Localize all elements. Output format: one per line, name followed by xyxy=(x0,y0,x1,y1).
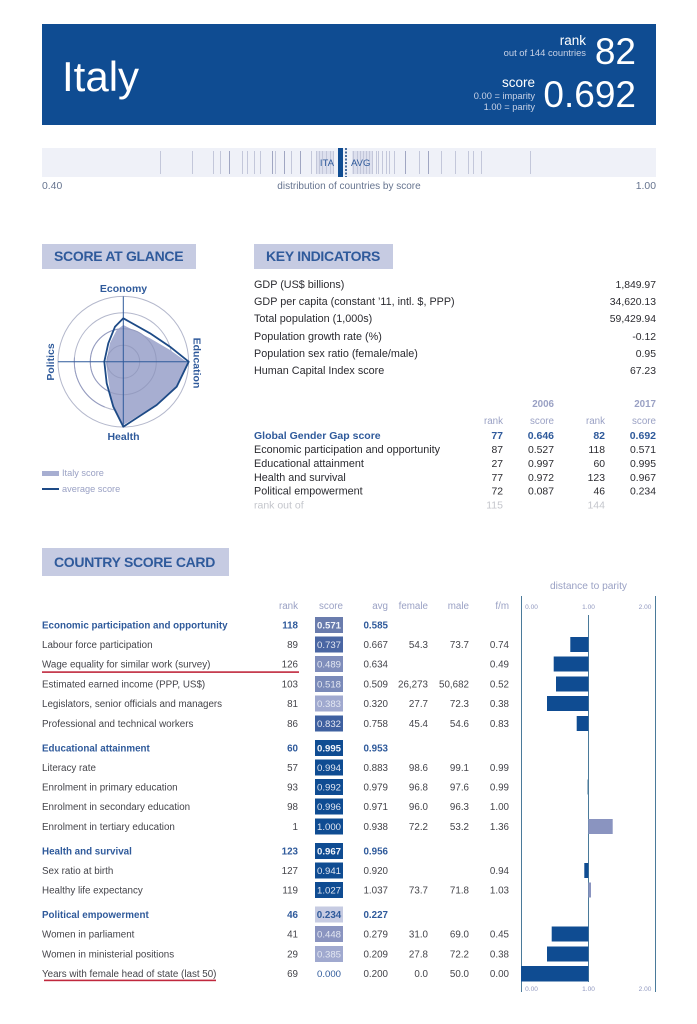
row: women in ministerial positions: 29 xyxy=(287,950,298,960)
row: wage equality: Wage equality for similar work (survey) xyxy=(42,660,210,670)
row: health and survival: Health and survival xyxy=(42,846,132,858)
axis label education: Education xyxy=(190,338,202,388)
row: earned income: Estimated earned income (PPP, US$) xyxy=(42,680,205,690)
row: economic participation: 0.571 xyxy=(317,620,342,632)
row: political empowerment: Political empowerment xyxy=(42,910,149,921)
gender gap history table: rank xyxy=(484,416,503,427)
heading: country score card xyxy=(42,548,229,576)
gender gap history table: 2006 xyxy=(532,399,555,410)
row: literacy: 0.994 xyxy=(317,763,342,774)
row: legislators xyxy=(42,696,510,712)
row: primary education: 0.99 xyxy=(490,782,509,794)
key indicators list: Population growth rate (%) xyxy=(254,331,382,343)
axis label health: Health xyxy=(107,431,140,443)
gender gap history table: 144 xyxy=(587,500,605,512)
row: wage equality: 126 xyxy=(282,660,299,670)
ITA label: ITA xyxy=(320,158,335,169)
Italy score area xyxy=(106,325,188,425)
gender gap history table: 2017 xyxy=(634,399,657,410)
row: tertiary education: 53.2 xyxy=(450,822,469,833)
radar legend: Italy score xyxy=(62,468,104,478)
row: healthy life expectancy: 1.027 xyxy=(317,886,341,896)
row: years with female head of state: Years with female head of state (last 50) xyxy=(42,969,216,980)
row: women in parliament xyxy=(42,926,510,942)
parity bars xyxy=(521,637,613,982)
key indicators list xyxy=(254,279,656,377)
row: labour force xyxy=(42,636,510,652)
gender gap history table: Educational attainment xyxy=(254,458,364,470)
row: literacy: 98.6 xyxy=(409,763,429,774)
row: political empowerment: 46 xyxy=(287,910,299,921)
top axis labels: 0.00 xyxy=(525,604,538,611)
row: secondary education: 96.0 xyxy=(409,802,429,813)
row: professional workers: 0.832 xyxy=(317,719,341,730)
heading: score at glance xyxy=(42,244,196,269)
row: literacy: Literacy rate xyxy=(42,763,96,774)
row: professional workers: 86 xyxy=(287,719,299,730)
row: women in parliament: 41 xyxy=(287,930,298,940)
row: educational attainment xyxy=(42,740,389,756)
red underline xyxy=(44,980,216,981)
row: sex ratio: 0.920 xyxy=(363,866,389,877)
row: healthy life expectancy: 1.03 xyxy=(490,886,510,896)
gender gap history table: score xyxy=(530,416,555,427)
row: secondary education: 1.00 xyxy=(490,802,510,813)
row: healthy life expectancy: 119 xyxy=(282,886,298,896)
row: economic participation: 118 xyxy=(282,620,299,632)
score card column headers: avg xyxy=(372,601,388,612)
row: women in parliament: 69.0 xyxy=(450,930,470,940)
row: labour force: Labour force participation xyxy=(42,640,153,651)
axis label economy: Economy xyxy=(100,283,147,295)
gender gap history table: Economic participation and opportunity xyxy=(254,444,441,456)
gender gap history table: 123 xyxy=(588,473,605,484)
row: political empowerment: 0.234 xyxy=(317,910,342,921)
row: health and survival: 0.967 xyxy=(317,846,341,858)
top axis labels xyxy=(525,604,652,611)
bottom axis labels: 0.00 xyxy=(525,986,538,993)
key indicators list: Total population (1,000s) xyxy=(254,313,372,325)
row: years with female head of state: 0.00 xyxy=(490,969,510,980)
row: secondary education: 0.996 xyxy=(317,802,341,813)
distribution axis max: 1.00 xyxy=(636,181,656,192)
distribution strip xyxy=(42,148,656,177)
row: health and survival xyxy=(42,843,389,859)
gender gap history table: 115 xyxy=(486,500,503,512)
row: legislators: 0.320 xyxy=(363,699,389,710)
radar chart xyxy=(45,283,202,443)
row: tertiary education: 1.000 xyxy=(317,822,341,833)
bottom axis labels xyxy=(525,986,652,993)
row: healthy life expectancy: 73.7 xyxy=(409,886,428,896)
row: secondary education xyxy=(42,798,510,814)
score card column headers xyxy=(279,601,509,612)
key indicators list: Population sex ratio (female/male) xyxy=(254,348,418,360)
row: wage equality xyxy=(42,656,509,673)
row: economic participation xyxy=(42,617,389,633)
top axis labels: 1.00 xyxy=(582,604,595,611)
row: tertiary education: Enrolment in tertiary education xyxy=(42,822,175,833)
row: literacy: 0.883 xyxy=(363,763,389,774)
row: sex ratio: 0.941 xyxy=(317,866,341,877)
row: tertiary education: 1 xyxy=(293,822,298,833)
row: years with female head of state: 69 xyxy=(287,969,298,980)
row: healthy life expectancy: 71.8 xyxy=(450,886,470,896)
country name: Italy xyxy=(62,53,139,100)
row: earned income: 26,273 xyxy=(398,680,429,690)
row: political empowerment xyxy=(42,906,389,922)
row: literacy xyxy=(42,760,509,776)
AVG label: AVG xyxy=(351,158,370,169)
gender gap history table: Political empowerment xyxy=(254,486,363,498)
radar legend: average score xyxy=(62,484,120,494)
bottom axis labels: 2.00 xyxy=(639,986,652,993)
score card column headers: f/m xyxy=(495,601,509,612)
gender gap history table: 0.997 xyxy=(528,459,554,470)
row: tertiary education xyxy=(42,818,510,834)
rank subtitle: out of 144 countries xyxy=(504,47,586,58)
gender gap history table: 46 xyxy=(593,486,605,498)
score card column headers: female xyxy=(399,601,429,612)
score scale note 2: 1.00 = parity xyxy=(484,102,535,112)
row: professional workers: 0.758 xyxy=(363,719,389,730)
row: tertiary education: 0.938 xyxy=(363,822,389,833)
key indicators list: -0.12 xyxy=(632,332,656,343)
row: educational attainment: 60 xyxy=(287,744,299,754)
gender gap history table: 77 xyxy=(491,473,503,484)
row: earned income: 0.52 xyxy=(490,680,509,690)
row: professional workers: 54.6 xyxy=(450,719,470,730)
key indicators list: Human Capital Index score xyxy=(254,365,384,377)
gender gap history table: 0.087 xyxy=(528,486,554,498)
row: literacy: 0.99 xyxy=(490,763,509,774)
score label: score xyxy=(502,75,535,90)
score card column headers: male xyxy=(448,601,470,612)
row: labour force: 0.737 xyxy=(317,640,341,651)
heading: key indicators xyxy=(254,244,393,269)
row: educational attainment: 0.995 xyxy=(317,744,342,754)
gender gap history table: 27 xyxy=(491,459,503,470)
row: primary education: 97.6 xyxy=(450,782,470,794)
row: women in parliament: 0.279 xyxy=(363,930,388,940)
row: women in ministerial positions: 0.209 xyxy=(363,950,388,960)
score scale note: 0.00 = imparity xyxy=(474,91,535,101)
row: legislators: Legislators, senior officials and managers xyxy=(42,699,222,710)
row: secondary education: Enrolment in secondary education xyxy=(42,802,190,813)
average score outline xyxy=(104,318,189,427)
row: legislators: 81 xyxy=(287,699,298,710)
row: women in ministerial positions: 0.38 xyxy=(490,950,510,960)
distribution caption: distribution of countries by score xyxy=(277,181,421,192)
row: sex ratio: 127 xyxy=(282,866,298,877)
gender gap history table: rank out of xyxy=(254,500,304,512)
row: labour force: 89 xyxy=(287,640,298,651)
row: literacy: 57 xyxy=(287,763,298,774)
gender gap history table: rank xyxy=(586,416,605,427)
gender gap history table: 0.995 xyxy=(630,459,656,470)
row: years with female head of state: 0.000 xyxy=(317,969,341,980)
axis label politics: Politics xyxy=(45,343,57,381)
row: secondary education: 96.3 xyxy=(450,802,470,813)
row: tertiary education: 1.36 xyxy=(490,822,510,833)
distribution axis min: 0.40 xyxy=(42,181,62,192)
row: women in ministerial positions xyxy=(42,946,510,962)
row: earned income: 50,682 xyxy=(439,680,469,690)
row: literacy: 99.1 xyxy=(450,763,469,774)
row: women in ministerial positions: 0.385 xyxy=(317,950,341,960)
gender gap history table: score xyxy=(632,416,657,427)
row: legislators: 0.38 xyxy=(490,699,510,710)
top axis labels: 2.00 xyxy=(639,604,652,611)
row: healthy life expectancy: Healthy life expectancy xyxy=(42,886,143,896)
row: primary education xyxy=(42,779,509,795)
chart title: distance to parity xyxy=(550,581,628,592)
score card column headers: rank xyxy=(279,601,298,612)
rank label: rank xyxy=(560,33,586,48)
row: tertiary education: 72.2 xyxy=(409,822,428,833)
row: sex ratio xyxy=(42,862,510,878)
row: earned income: 0.509 xyxy=(363,680,388,690)
gender gap history table: 0.692 xyxy=(630,430,656,442)
gender gap history table: 60 xyxy=(593,459,605,470)
row: labour force: 0.74 xyxy=(490,640,510,651)
row: earned income: 103 xyxy=(282,680,299,690)
average marker xyxy=(345,148,347,177)
gender gap history table: 0.972 xyxy=(528,473,554,484)
row: health and survival: 123 xyxy=(282,846,299,858)
distance to parity chart xyxy=(521,581,656,993)
row: wage equality: 0.634 xyxy=(363,660,389,670)
row: labour force: 0.667 xyxy=(363,640,388,651)
row: earned income: 0.518 xyxy=(317,680,341,690)
row: women in ministerial positions: Women in ministerial positions xyxy=(42,950,174,960)
gender gap history table xyxy=(254,399,657,512)
gender gap history table: 0.527 xyxy=(528,445,554,456)
row: primary education: 0.992 xyxy=(317,782,341,794)
row: professional workers: 45.4 xyxy=(409,719,429,730)
row: labour force: 54.3 xyxy=(409,640,429,651)
row: healthy life expectancy xyxy=(42,882,510,898)
row: women in ministerial positions: 72.2 xyxy=(450,950,469,960)
row: earned income xyxy=(42,676,509,692)
row: years with female head of state: 0.200 xyxy=(363,969,389,980)
header banner xyxy=(42,24,656,125)
key indicators list: 34,620.13 xyxy=(610,297,656,308)
row: sex ratio: 0.94 xyxy=(490,866,510,877)
gender gap history table: 87 xyxy=(491,445,503,456)
row: years with female head of state xyxy=(42,969,510,981)
row: legislators: 72.3 xyxy=(450,699,470,710)
gender gap history table: 0.967 xyxy=(630,473,656,484)
row: primary education: 93 xyxy=(287,782,299,794)
key indicators list: 0.95 xyxy=(636,349,656,360)
row: healthy life expectancy: 1.037 xyxy=(363,886,388,896)
row: legislators: 27.7 xyxy=(409,699,428,710)
gender gap history table: 82 xyxy=(593,430,605,442)
rank value: 82 xyxy=(595,31,636,72)
score card column headers: score xyxy=(319,601,344,612)
row: primary education: 96.8 xyxy=(409,782,429,794)
row: primary education: Enrolment in primary education xyxy=(42,782,178,794)
gender gap history table: Global Gender Gap score xyxy=(254,430,381,442)
red underline xyxy=(42,671,299,673)
gender gap history table: 77 xyxy=(491,430,503,442)
row: women in parliament: 0.45 xyxy=(490,930,510,940)
Italy marker xyxy=(338,148,343,177)
row: educational attainment: 0.953 xyxy=(363,744,389,754)
key indicators list: 67.23 xyxy=(630,366,656,377)
gender gap history table: 118 xyxy=(588,445,605,456)
row: wage equality: 0.49 xyxy=(490,660,509,670)
row: legislators: 0.383 xyxy=(317,699,341,710)
gender gap history table: 72 xyxy=(491,486,503,498)
row: economic participation: 0.585 xyxy=(363,620,389,632)
row: secondary education: 0.971 xyxy=(363,802,388,813)
row: wage equality: 0.489 xyxy=(317,660,341,670)
row: years with female head of state: 0.0 xyxy=(414,969,429,980)
gender gap history table: Health and survival xyxy=(254,472,346,484)
row: women in ministerial positions: 27.8 xyxy=(409,950,429,960)
row: secondary education: 98 xyxy=(287,802,299,813)
row: political empowerment: 0.227 xyxy=(363,910,389,921)
key indicators list: 1,849.97 xyxy=(616,280,656,291)
gender gap history table: 0.571 xyxy=(630,445,656,456)
key indicators list: GDP per capita (constant ’11, intl. $, PPP) xyxy=(254,296,455,308)
key indicators list: GDP (US$ billions) xyxy=(254,279,344,291)
gender gap history table: 0.646 xyxy=(528,430,554,442)
row: women in parliament: 31.0 xyxy=(409,930,429,940)
gender gap history table: 0.234 xyxy=(630,486,656,498)
row: sex ratio: Sex ratio at birth xyxy=(42,866,113,877)
row: professional workers: 0.83 xyxy=(490,719,510,730)
row: health and survival: 0.956 xyxy=(363,846,389,858)
row: women in parliament: 0.448 xyxy=(317,930,341,940)
heading: score at glance: SCORE AT GLANCE xyxy=(54,248,183,264)
key indicators list: 59,429.94 xyxy=(610,314,656,325)
row: years with female head of state: 50.0 xyxy=(450,969,470,980)
row: labour force: 73.7 xyxy=(450,640,469,651)
row: primary education: 0.979 xyxy=(363,782,388,794)
heading: country score card: COUNTRY SCORE CARD xyxy=(54,554,215,570)
row: professional workers: Professional and technical workers xyxy=(42,719,193,730)
chart axes xyxy=(522,596,656,992)
row: economic participation: Economic participation and opportunity xyxy=(42,620,228,632)
score value: 0.692 xyxy=(543,74,636,115)
bottom axis labels: 1.00 xyxy=(582,986,595,993)
radar legend xyxy=(42,468,120,494)
heading: key indicators: KEY INDICATORS xyxy=(266,248,380,264)
row: educational attainment: Educational attainment xyxy=(42,744,151,754)
row: professional workers xyxy=(42,716,510,732)
row: women in parliament: Women in parliament xyxy=(42,930,135,940)
